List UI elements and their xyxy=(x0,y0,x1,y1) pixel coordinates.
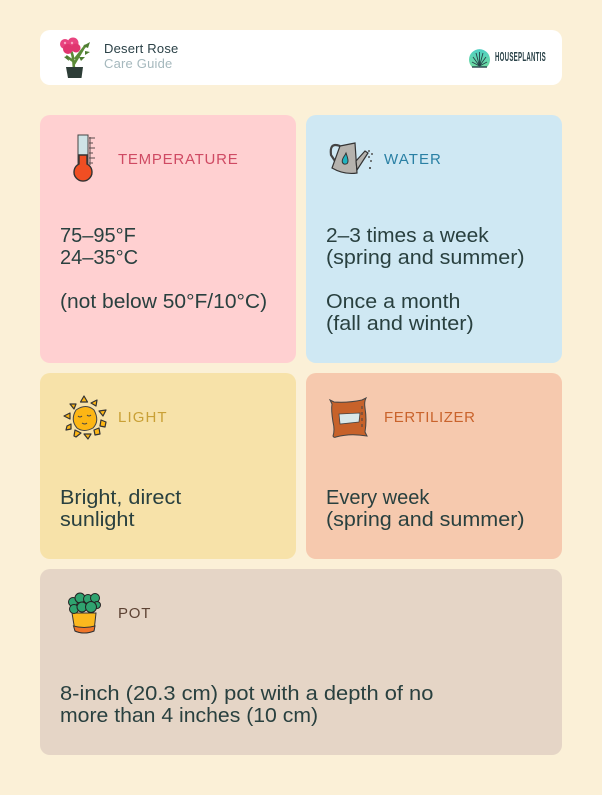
fertilizer details: Every week xyxy=(326,487,429,509)
heading: fertilizer: FERTILIZER xyxy=(384,409,476,426)
icon: sun xyxy=(63,395,107,440)
icon: potted succulent xyxy=(68,592,101,634)
pot details xyxy=(60,683,433,727)
light details: sunlight xyxy=(60,509,134,531)
icon: fertilizer bag xyxy=(329,397,368,438)
water details: (spring and summer) xyxy=(326,247,525,269)
icon: watering can xyxy=(330,142,373,174)
fertilizer details xyxy=(326,487,525,531)
icon: desert rose plant xyxy=(60,38,90,78)
panel: water xyxy=(306,115,562,363)
panel: temperature xyxy=(40,115,296,363)
temperature details: (not below 50°F/10°C) xyxy=(60,291,267,313)
header bar xyxy=(40,30,562,85)
fertilizer details: (spring and summer) xyxy=(326,509,525,531)
temperature details xyxy=(60,225,267,313)
plant title: Desert Rose xyxy=(104,41,178,56)
heading: temperature: TEMPERATURE xyxy=(118,151,238,168)
heading: water: WATER xyxy=(384,151,442,168)
water details: (fall and winter) xyxy=(326,313,474,335)
heading: light: LIGHT xyxy=(118,409,168,426)
logo: Houseplantis: HOUSEPLANTIS xyxy=(495,50,546,64)
pot details: 8-inch (20.3 cm) pot with a depth of no xyxy=(60,683,433,705)
light details xyxy=(60,487,182,531)
panel: pot xyxy=(40,569,562,755)
water details xyxy=(326,225,525,335)
icon: thermometer xyxy=(73,134,95,182)
logo: Houseplantis xyxy=(469,49,546,68)
pot details: more than 4 inches (10 cm) xyxy=(60,705,318,727)
temperature details: 24–35°C xyxy=(60,247,138,269)
subtitle: Care Guide xyxy=(104,56,172,71)
heading: pot: POT xyxy=(118,605,151,622)
water details: 2–3 times a week xyxy=(326,225,489,247)
panel: light xyxy=(40,373,296,559)
panel: fertilizer xyxy=(306,373,562,559)
light details: Bright, direct xyxy=(60,487,181,509)
water details: Once a month xyxy=(326,291,460,313)
temperature details: 75–95°F xyxy=(60,225,136,247)
